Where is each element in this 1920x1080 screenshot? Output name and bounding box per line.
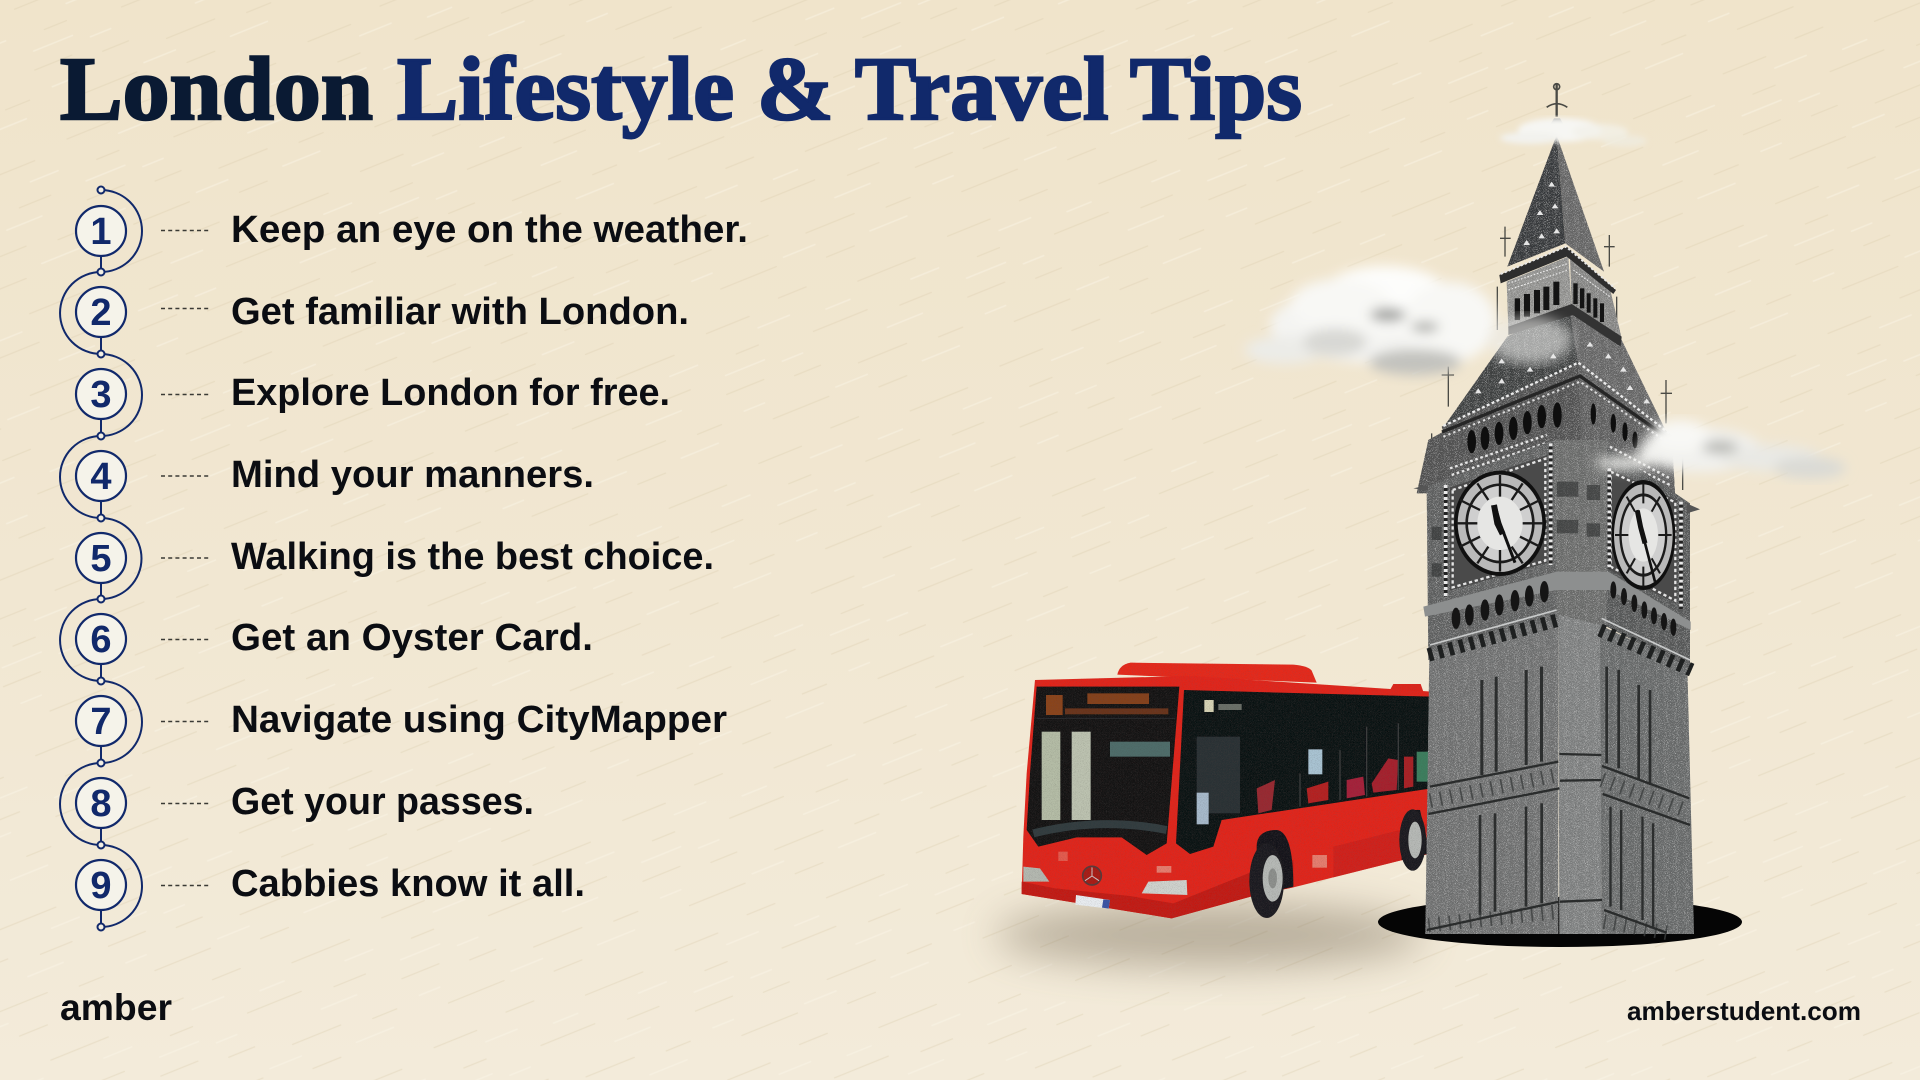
title: Lifestyle & Travel Tips <box>397 40 1302 139</box>
website url: amberstudent.com <box>1627 996 1861 1026</box>
numbered timeline <box>60 186 142 930</box>
number 9: 9 <box>90 865 112 907</box>
number 7: 7 <box>90 701 112 743</box>
number 2 <box>76 287 126 337</box>
tip 1: Keep an eye on the weather. <box>231 209 748 251</box>
tip 7: Navigate using CityMapper <box>231 699 727 741</box>
tips list <box>231 209 748 905</box>
icon: Big Ben tower <box>1413 83 1700 934</box>
number 6: 6 <box>90 619 112 661</box>
tip 8: Get your passes. <box>231 781 534 823</box>
number 1 <box>76 206 126 256</box>
cloud: left of tower <box>1245 266 1496 375</box>
number 7 <box>76 696 126 746</box>
number 8 <box>76 778 126 828</box>
number 5 <box>76 533 126 583</box>
tip 4: Mind your manners. <box>231 454 594 496</box>
haze over roof <box>1488 316 1572 364</box>
title: London <box>60 40 373 139</box>
number 5: 5 <box>90 538 112 580</box>
number 1: 1 <box>90 211 112 253</box>
number 8: 8 <box>90 783 112 825</box>
number 6 <box>76 614 126 664</box>
tip 6: Get an Oyster Card. <box>231 617 593 659</box>
number 3 <box>76 369 126 419</box>
number 4 <box>76 451 126 501</box>
tower upper: spire, belfry and roof <box>1417 83 1683 493</box>
cloud: right of tower <box>1595 420 1846 479</box>
tip 5: Walking is the best choice. <box>231 536 714 578</box>
icon: red bus <box>1022 663 1432 918</box>
tower lower: clock stage and shaft <box>1413 440 1700 934</box>
tip 9: Cabbies know it all. <box>231 863 585 905</box>
number 9 <box>76 860 126 910</box>
number 4: 4 <box>90 456 112 498</box>
number 2: 2 <box>90 292 112 334</box>
tip 3: Explore London for free. <box>231 372 670 414</box>
cloud: at spire <box>1500 118 1647 147</box>
bus shadow <box>995 903 1425 967</box>
logo: amber: amber <box>60 987 172 1028</box>
hole ellipse <box>1378 897 1742 947</box>
tip 2: Get familiar with London. <box>231 291 689 333</box>
number 3: 3 <box>90 374 112 416</box>
